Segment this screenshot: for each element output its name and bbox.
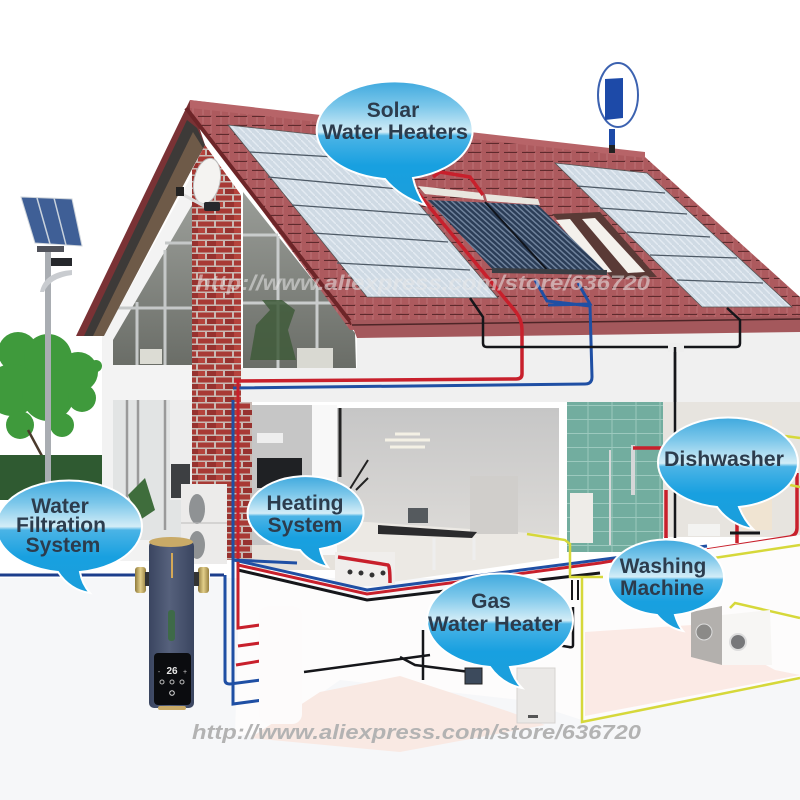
interior living room	[337, 408, 559, 590]
right gable window	[243, 192, 356, 368]
callout: solar water heaters: Solar	[367, 99, 419, 122]
gold top cap	[149, 537, 193, 547]
red hot water pipe from collector	[234, 172, 522, 381]
blue cold water pipe from collector	[233, 280, 592, 388]
touch display: 26	[166, 666, 178, 677]
interior left room	[252, 405, 352, 570]
touch display	[154, 653, 191, 705]
washing machines	[691, 606, 772, 665]
callout: washing machine: Machine	[620, 577, 704, 600]
watermark upper: http://www.aliexpress.com/store/636720	[196, 272, 650, 295]
wall thermostat	[465, 668, 482, 684]
gold indicator strip	[171, 553, 173, 578]
callout: washing machine	[608, 539, 724, 631]
callout: heating system	[248, 476, 364, 567]
skylight window	[552, 212, 657, 278]
callout: water filtration system	[0, 481, 142, 593]
yellow wire routes	[527, 436, 800, 722]
solar water heater collector	[418, 186, 607, 275]
desk and laptop	[378, 508, 477, 570]
callout: gas water heater: Water Heater	[428, 613, 562, 636]
callout: gas water heater: Gas	[471, 590, 511, 613]
touch display: +	[183, 669, 187, 676]
callout: solar water heaters	[317, 81, 473, 205]
outdoor heat pump unit	[181, 484, 227, 564]
callout: water filtration system: Filtration	[16, 514, 106, 537]
tree	[0, 332, 102, 456]
solar street light	[21, 197, 82, 482]
water filtration device	[135, 537, 209, 710]
vertical riser pipes to tank	[225, 381, 297, 704]
gable fascia	[76, 100, 205, 336]
callout: dishwasher: Dishwasher	[664, 448, 784, 471]
black roof cable	[470, 298, 740, 402]
solar panels right	[555, 163, 792, 307]
callout: gas water heater	[427, 573, 573, 688]
wind turbine	[598, 63, 638, 153]
device body	[149, 541, 194, 708]
satellite dish	[176, 156, 224, 211]
touch display: -	[158, 669, 161, 676]
main floor pipes	[234, 546, 707, 600]
solar panels left	[228, 125, 498, 298]
brick chimney wall	[192, 145, 252, 560]
hedge	[0, 455, 102, 500]
callout: water filtration system: Water	[31, 495, 89, 518]
hot water storage tank	[259, 606, 302, 724]
callout: heating system: Heating	[266, 492, 344, 515]
interior kitchen	[663, 347, 800, 550]
callout: dishwasher	[658, 418, 798, 529]
callout: solar water heaters: Water Heaters	[322, 121, 468, 144]
interior bathroom	[567, 402, 666, 552]
upper left gable window	[103, 175, 192, 400]
house lower left glass and wall	[102, 336, 194, 561]
gas water heater unit	[517, 668, 555, 723]
roof	[186, 100, 800, 338]
green sight window	[168, 610, 175, 641]
basement walls	[235, 535, 800, 752]
callout: heating system: System	[268, 514, 342, 537]
heating manifold and staircase	[335, 408, 395, 586]
white upper wall band	[241, 322, 800, 402]
chandelier	[385, 434, 430, 447]
brass connectors	[135, 567, 209, 593]
callout: water filtration system: System	[26, 534, 100, 557]
callout: washing machine: Washing	[620, 555, 706, 578]
water inlet pipe	[0, 574, 224, 576]
gold base	[158, 706, 186, 710]
junction box	[668, 343, 684, 352]
watermark lower: http://www.aliexpress.com/store/636720	[192, 722, 641, 744]
black basement cable	[304, 580, 578, 680]
